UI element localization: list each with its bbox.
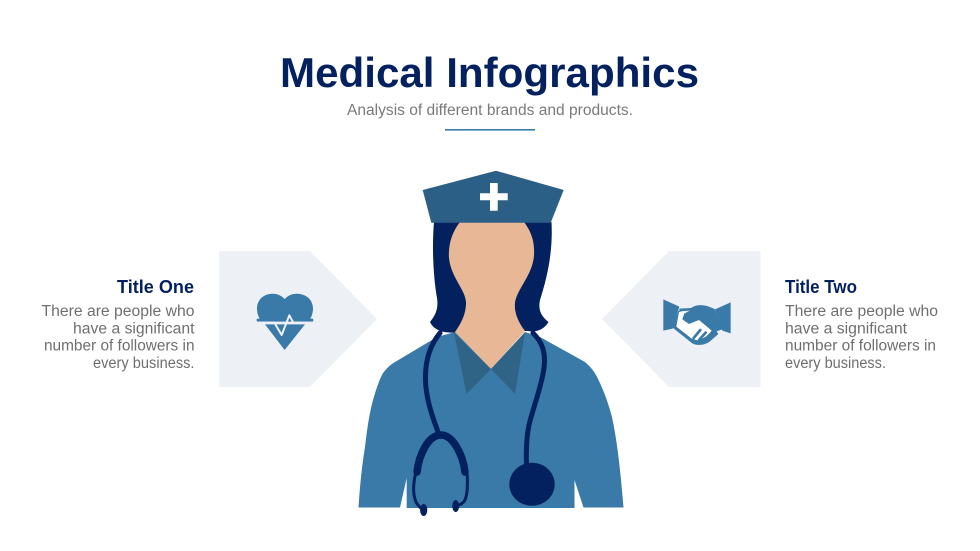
panel: right arrow box (602, 251, 760, 387)
collar (454, 332, 525, 394)
heading: title one: Title One (117, 277, 194, 297)
hair (430, 222, 552, 333)
subtitle: Analysis of different brands and products. (347, 102, 633, 119)
stethoscope (414, 333, 555, 516)
title: Medical Infographics (280, 49, 699, 96)
text block: title one (42, 277, 195, 372)
text block: title two (785, 277, 938, 372)
body copy right: number of followers in (785, 338, 936, 354)
panel: left arrow box (219, 251, 377, 387)
icon: heart with pulse (256, 294, 314, 350)
title underline (445, 129, 535, 131)
body copy right: every business. (785, 355, 886, 372)
nurse cap (423, 171, 564, 223)
face and neck (449, 222, 534, 369)
heading: title two: Title Two (785, 277, 857, 297)
body copy left (42, 303, 195, 372)
header (280, 49, 699, 131)
nurse figure (358, 171, 624, 516)
icon: handshake (663, 299, 731, 345)
body copy left: number of followers in (44, 338, 194, 354)
body copy right (785, 303, 938, 372)
body copy left: have a significant (73, 320, 195, 338)
body copy right: have a significant (785, 320, 908, 338)
body copy right: There are people who (785, 303, 938, 320)
body copy left: every business. (93, 355, 194, 372)
uniform (358, 332, 624, 508)
cap cross (480, 183, 508, 211)
body copy left: There are people who (42, 303, 194, 320)
